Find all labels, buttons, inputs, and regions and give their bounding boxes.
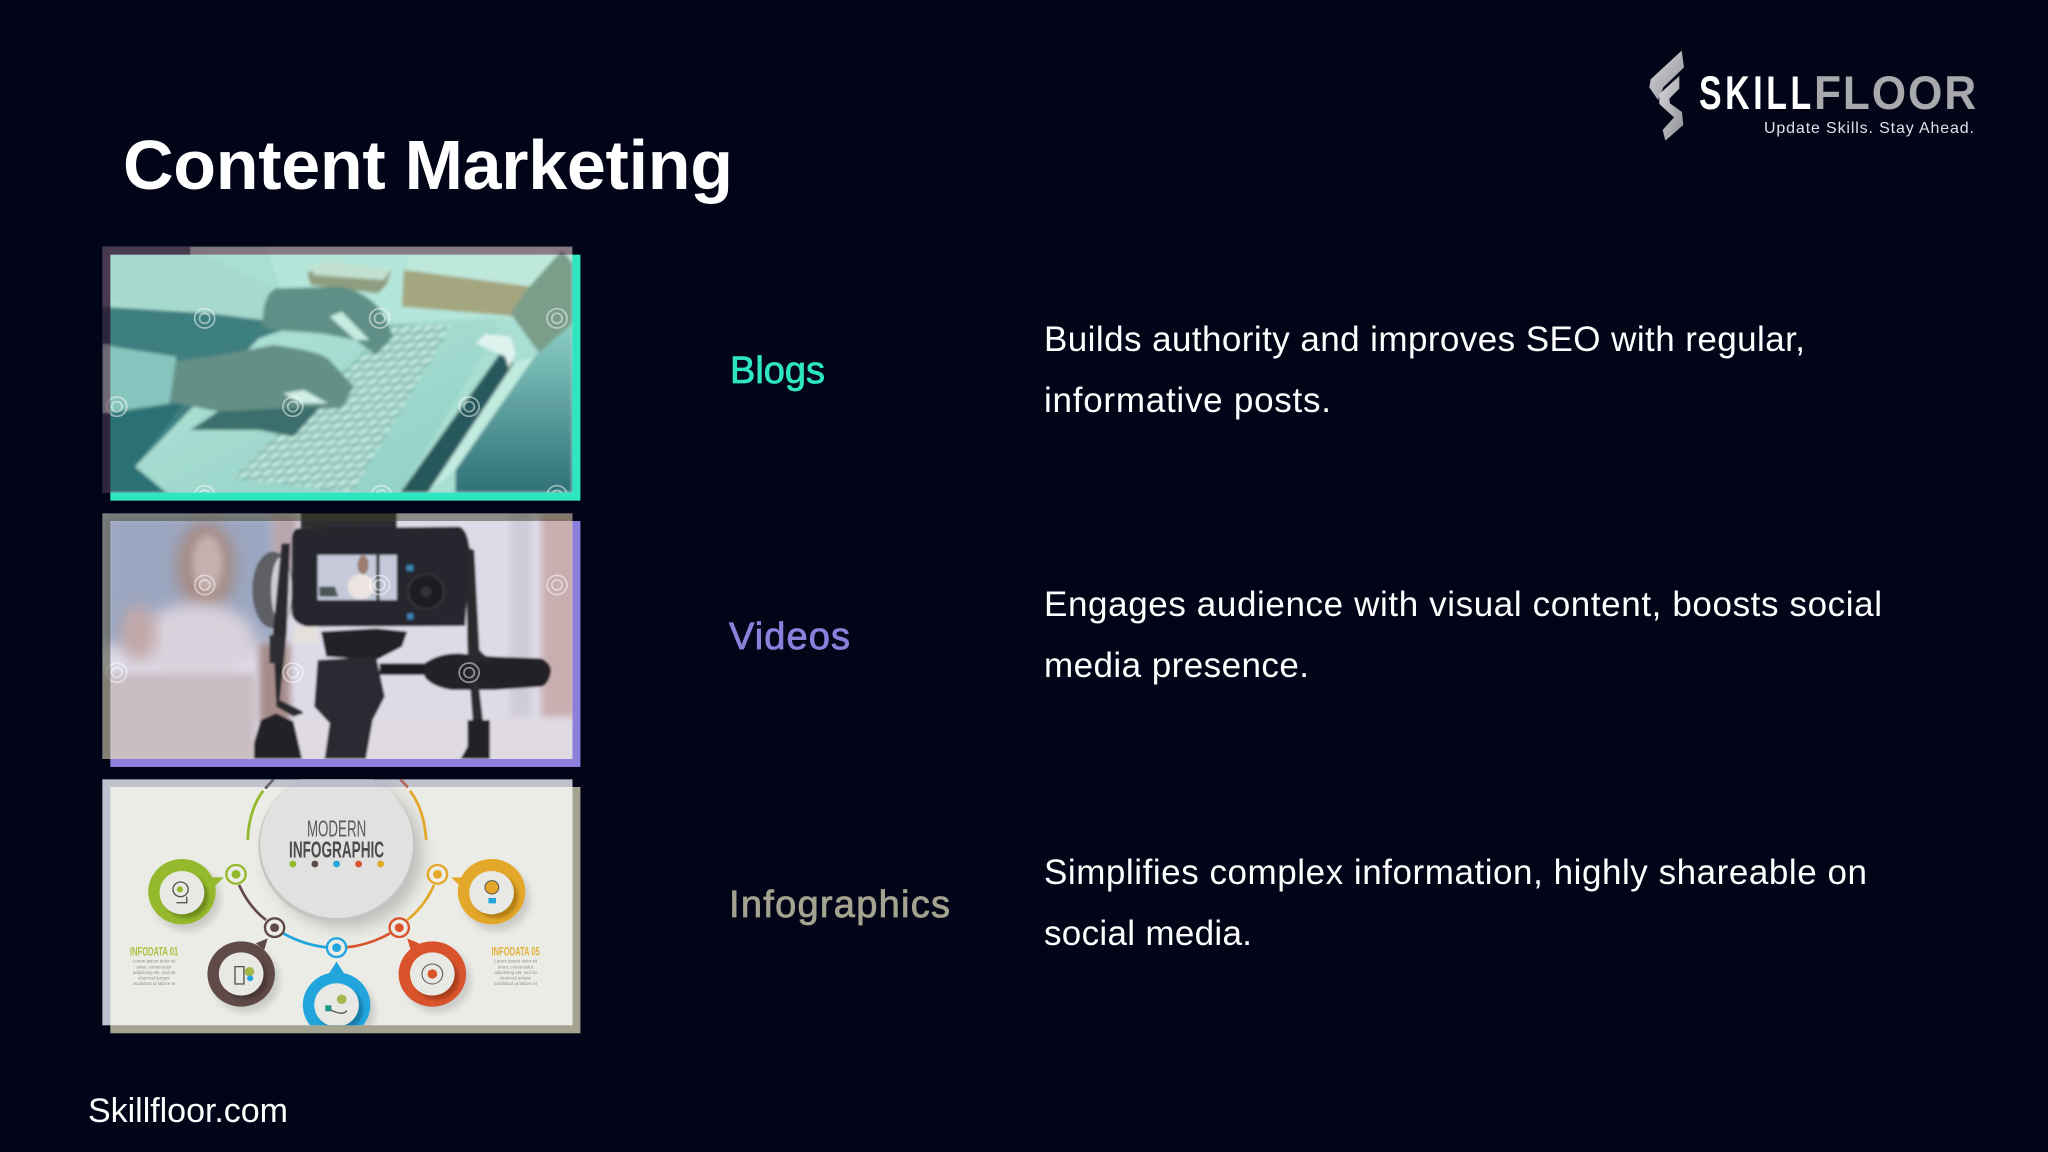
description: Videos: Engages audience with visual content, boosts social [1044, 585, 1882, 624]
node: blue [302, 937, 378, 1026]
caption: infodata 05: amet, consectetur [498, 964, 534, 969]
panel: blogs [101, 245, 1805, 505]
photo: camera filming [101, 512, 580, 767]
node: brown [207, 918, 284, 1013]
panel: videos [101, 512, 1882, 767]
label: Blogs: Blogs [730, 350, 825, 392]
caption: infodata 01: adipiscing elit, sed do [133, 970, 176, 975]
node: yellow [428, 859, 530, 931]
node: red [390, 918, 471, 1013]
title: Content Marketing [123, 126, 733, 204]
label: Videos: Videos [729, 616, 850, 658]
description: Blogs: Builds authority and improves SEO with regular, [1044, 320, 1805, 359]
logo wordmark: FLOOR [1814, 67, 1978, 119]
caption: infodata 01: incididunt ut labore et [133, 981, 176, 986]
caption: infodata 01: eiusmod tempor [138, 975, 171, 980]
caption: infodata 05: incididunt ut labore et [494, 981, 538, 986]
image: modern infographic [101, 770, 580, 1044]
node: green [148, 859, 246, 931]
big circle: INFOGRAPHIC [289, 838, 384, 863]
caption: infodata 01: amet, consectetur [136, 964, 172, 969]
caption: infodata 05: INFODATA 05 [492, 944, 540, 958]
description: Blogs: informative posts. [1044, 381, 1331, 420]
footer: website: Skillfloor.com [88, 1092, 288, 1130]
label: Infographics: Infographics [729, 884, 950, 926]
photo: laptop typing [101, 245, 580, 505]
icon: logo mark [1649, 51, 1684, 141]
big circle: MODERN [307, 817, 366, 843]
logo: Skillfloor [1649, 51, 1978, 141]
caption: infodata 01: INFODATA 01 [130, 944, 178, 958]
big circle [258, 770, 423, 928]
caption: infodata 05: eiusmod tempor [500, 975, 532, 980]
logo tagline: Update Skills. Stay Ahead. [1764, 120, 1974, 137]
caption: infodata 05: adipiscing elit, sed do [494, 970, 538, 975]
caption: infodata 01 [130, 944, 178, 986]
description: Videos: media presence. [1044, 646, 1309, 685]
logo wordmark: SKILL [1699, 67, 1815, 119]
caption: infodata 05: Lorem ipsum dolor sit [494, 959, 538, 964]
description: Infographics: Simplifies complex information, highly shareable on [1044, 853, 1867, 892]
caption: infodata 01: Lorem ipsum dolor sit [133, 959, 176, 964]
logo wordmark [1699, 67, 1978, 119]
connecting arcs [239, 779, 434, 947]
caption: infodata 05 [492, 944, 540, 986]
panel: infographics [101, 770, 1867, 1044]
description: Infographics: social media. [1044, 914, 1252, 953]
